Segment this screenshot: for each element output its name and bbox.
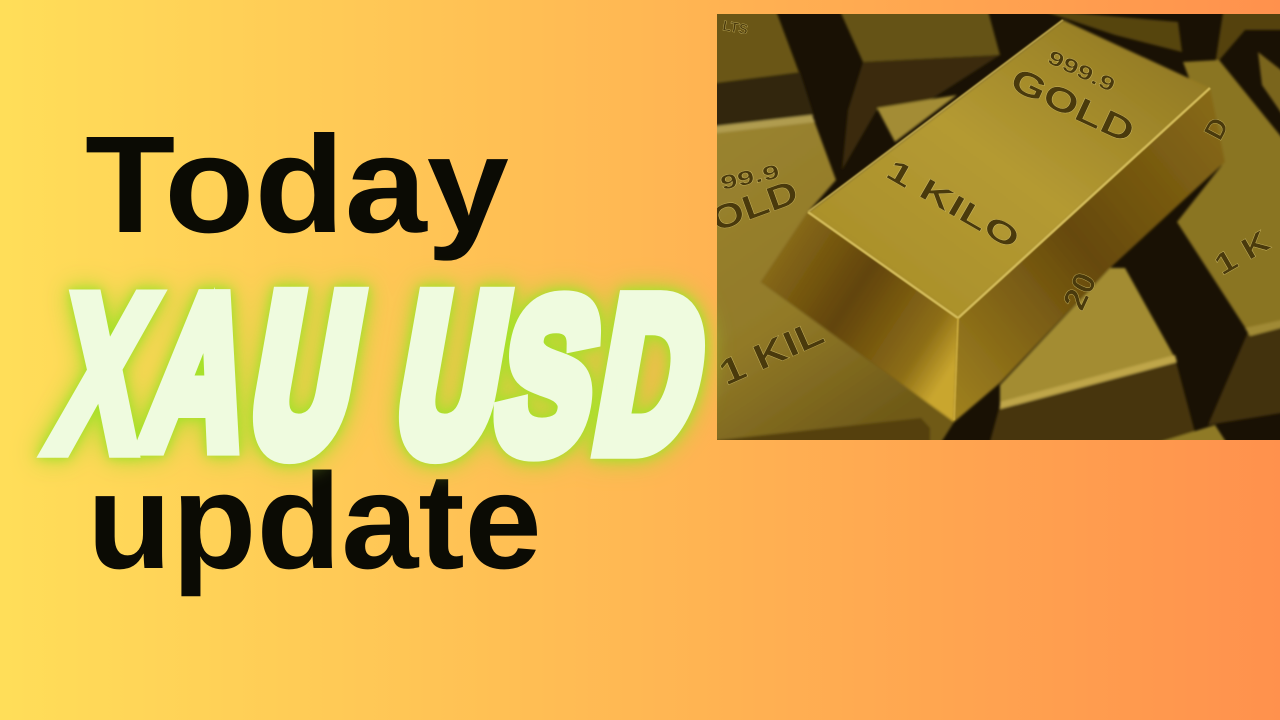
top-left bar bbox=[717, 14, 800, 84]
headline: XAU USD with green glow: A bbox=[130, 254, 270, 492]
photo: gold bars bbox=[717, 14, 1280, 440]
engraved labels: OLD bbox=[706, 173, 803, 240]
headline: XAU USD with green glow: S bbox=[482, 258, 616, 495]
headline: XAU USD with green glow: X bbox=[37, 250, 170, 498]
bottom bits bbox=[1162, 424, 1226, 440]
engraved labels: GOLD bbox=[1005, 61, 1140, 151]
engraved labels: LTS bbox=[721, 17, 749, 37]
engraved labels: 1 K bbox=[1209, 224, 1276, 282]
engraved labels: 99.9 bbox=[718, 161, 782, 195]
heading: update: update bbox=[87, 445, 542, 597]
headline: XAU USD with green glow: D bbox=[582, 256, 722, 494]
headline: XAU USD with green glow: U bbox=[383, 254, 521, 496]
heading: Today: Today bbox=[85, 108, 509, 262]
right bar bbox=[1177, 60, 1280, 332]
left lower bar bbox=[700, 115, 954, 460]
headline: XAU USD with green glow: U bbox=[237, 254, 375, 496]
lower-middle bar bbox=[1000, 268, 1175, 405]
engraved labels: D bbox=[1198, 112, 1235, 145]
engraved labels: 1 KILO bbox=[880, 153, 1025, 256]
engraved labels: 20 bbox=[1056, 267, 1104, 315]
engraved labels: 999.9 bbox=[1044, 47, 1118, 97]
top-middle bar bbox=[840, 14, 1001, 64]
engraved labels bbox=[706, 17, 1276, 393]
engraved labels: 1 KIL bbox=[713, 311, 830, 393]
upper-right bars bbox=[1048, 14, 1183, 53]
wedge bar bbox=[877, 95, 957, 142]
main bar bbox=[761, 212, 958, 422]
